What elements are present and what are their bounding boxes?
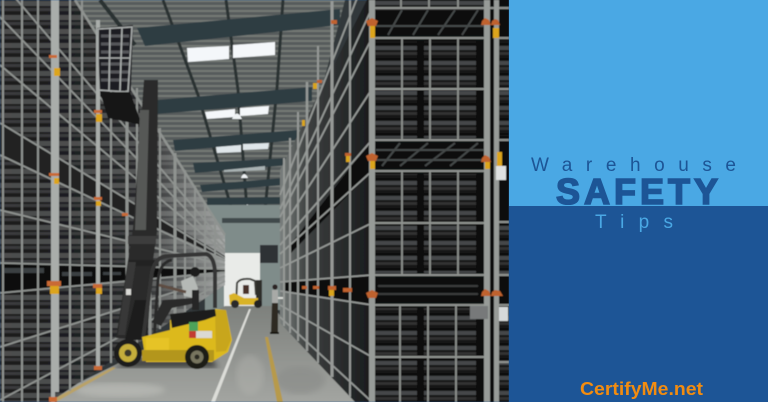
mast <box>116 80 158 340</box>
rack posts <box>3 0 215 402</box>
orange post caps <box>302 20 352 292</box>
warehouse ceiling <box>75 0 345 210</box>
front wheel <box>114 339 142 367</box>
safety stickers <box>189 322 212 338</box>
stacked tyres <box>375 0 509 402</box>
warehouse floor <box>40 306 356 402</box>
yellow body <box>142 309 232 362</box>
back wall of the aisle <box>205 205 285 310</box>
distant forklift <box>229 279 262 308</box>
skylights <box>187 42 275 172</box>
dark gaps between rack levels <box>0 263 225 293</box>
light details in the gap <box>4 268 121 276</box>
rear wheel <box>185 345 209 369</box>
raised pallet of tyres <box>97 25 142 125</box>
forklift in the foreground <box>114 80 232 369</box>
right tyre racks, angled side <box>280 0 372 402</box>
overhead guard <box>143 254 215 340</box>
post caps <box>47 55 128 402</box>
rack rails <box>0 0 225 400</box>
left tyre racks <box>0 0 225 402</box>
steel cross beams <box>137 9 340 205</box>
main posts <box>369 0 499 402</box>
engine cover <box>170 309 216 328</box>
heading line: SAFETY: SAFETY <box>556 171 718 212</box>
title panel: light blue upper block <box>509 0 768 206</box>
heading line: Tips: Tips <box>595 212 673 233</box>
dark dividers between tyre stacks <box>417 41 485 402</box>
title panel: dark blue lower block <box>509 206 768 402</box>
heading line: Warehouse: Warehouse <box>531 155 736 176</box>
worker with clipboard <box>270 284 283 334</box>
paper labels <box>470 166 508 321</box>
dark gaps <box>285 140 372 305</box>
lower gap detail <box>378 285 478 295</box>
right tyre racks, front face <box>366 0 509 402</box>
hanging lamps <box>232 114 250 207</box>
driver <box>152 267 200 326</box>
roof rafters <box>100 0 283 210</box>
photo contents <box>0 0 509 402</box>
posts <box>284 0 350 397</box>
pallet struts in the upper gaps <box>376 10 485 166</box>
post caps <box>366 18 503 298</box>
rails <box>280 0 372 402</box>
front inner bars <box>400 0 458 402</box>
brand name: CertifyMe.net: CertifyMe.net <box>580 379 703 399</box>
front rails <box>372 8 509 362</box>
